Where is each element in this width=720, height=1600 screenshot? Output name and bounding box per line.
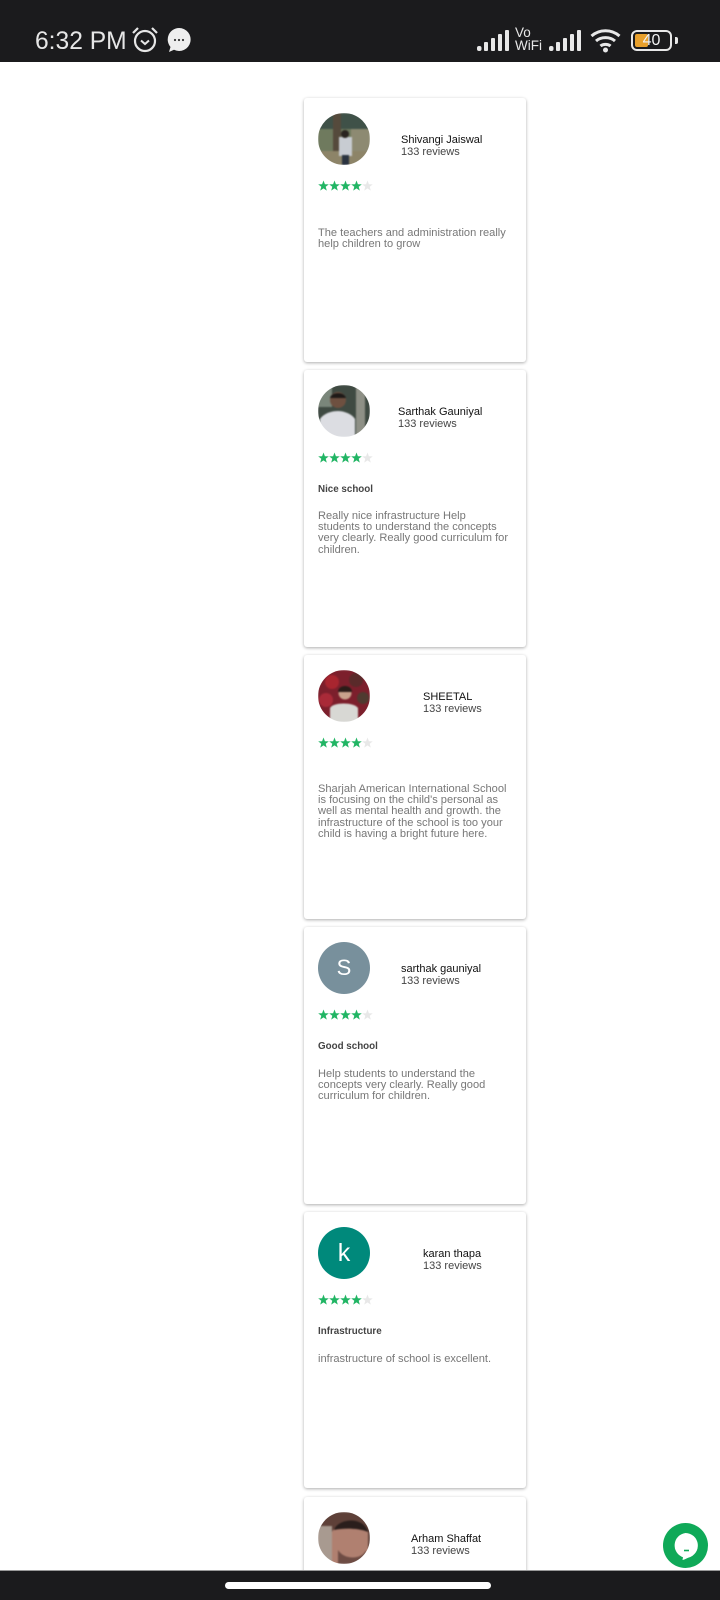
reviewer name [401,134,482,158]
star rating [318,452,372,462]
avatar photo [318,670,370,722]
reviewer name [398,406,482,430]
reviewer name: 133 reviews [423,703,482,715]
reviewer name: 133 reviews [401,146,460,158]
icon: signal one [477,30,509,51]
panel: review Shivangi Jaiswal [304,98,526,362]
avatar photo [318,1512,370,1564]
avatar photo [318,113,370,165]
icon: alarm [132,27,158,52]
chat button [663,1523,708,1568]
VoWiFi label: Vo [515,25,531,40]
avatar photo [318,385,370,437]
reviewer name: SHEETAL [423,691,472,703]
review text [318,227,506,250]
panel: review sarthak gauniyal [304,927,526,1204]
review text: very clearly. Really good curriculum for [318,532,508,544]
review text: child is having a bright future here. [318,828,487,840]
reviewer name: 133 reviews [411,1545,470,1557]
review text: concepts very clearly. Really good [318,1079,485,1091]
reviewer name: Sarthak Gauniyal [398,406,482,418]
icon: signal two [549,30,581,51]
icon: battery: 40 [643,32,660,49]
icon: chat bubble [168,28,191,52]
reviewer name [423,1248,482,1272]
reviewer name: Arham Shaffat [411,1533,481,1545]
review text: The teachers and administration really [318,227,506,239]
panel: review Arham Shaffat [302,1496,528,1570]
status bar [0,0,720,62]
reviewer name: 133 reviews [398,418,457,430]
panel: review SHEETAL [304,655,526,919]
review text [318,1068,485,1102]
avatar letter [318,1227,370,1279]
review text: Help students to understand the [318,1068,475,1080]
avatar letter [318,942,370,994]
review text: Sharjah American International School [318,783,506,795]
icon: wifi [590,29,620,52]
review text [318,510,508,556]
star rating [318,738,372,748]
star rating [318,1010,372,1020]
review text: Really nice infrastructure Help [318,510,466,522]
review text: curriculum for children. [318,1090,430,1102]
review text: is focusing on the child's personal as [318,794,498,806]
panel: review Sarthak Gauniyal [304,370,526,647]
avatar letter: S [337,955,351,980]
star rating [318,1294,372,1304]
icon: battery tip [675,37,678,44]
review text: infrastructure of the school is too your [318,817,503,829]
panel: review karan thapa [304,1212,526,1488]
icon: battery [631,30,672,51]
reviewer name [401,963,481,987]
navigation bar [0,1570,720,1600]
star rating [318,180,372,190]
reviewer name: 133 reviews [423,1260,482,1272]
review text: children. [318,544,360,556]
review text: well as mental health and growth. the [318,805,501,817]
reviewer name: Shivangi Jaiswal [401,134,482,146]
clock: 6:32 PM [35,28,127,55]
home indicator [225,1582,491,1589]
reviewer name: karan thapa [423,1248,481,1260]
VoWiFi label: WiFi [515,38,542,52]
reviewer name [411,1533,481,1557]
review title: Nice school [318,484,373,495]
avatar letter: k [338,1239,350,1267]
review text: students to understand the concepts [318,521,497,533]
review text: infrastructure of school is excellent. [318,1352,491,1364]
review text: help children to grow [318,238,420,250]
VoWiFi label [515,25,542,52]
reviewer name: 133 reviews [401,975,460,987]
review text [318,783,506,840]
reviewer name: sarthak gauniyal [401,963,481,975]
review title: Good school [318,1041,378,1052]
review title: Infrastructure [318,1326,382,1337]
reviewer name [423,691,482,715]
